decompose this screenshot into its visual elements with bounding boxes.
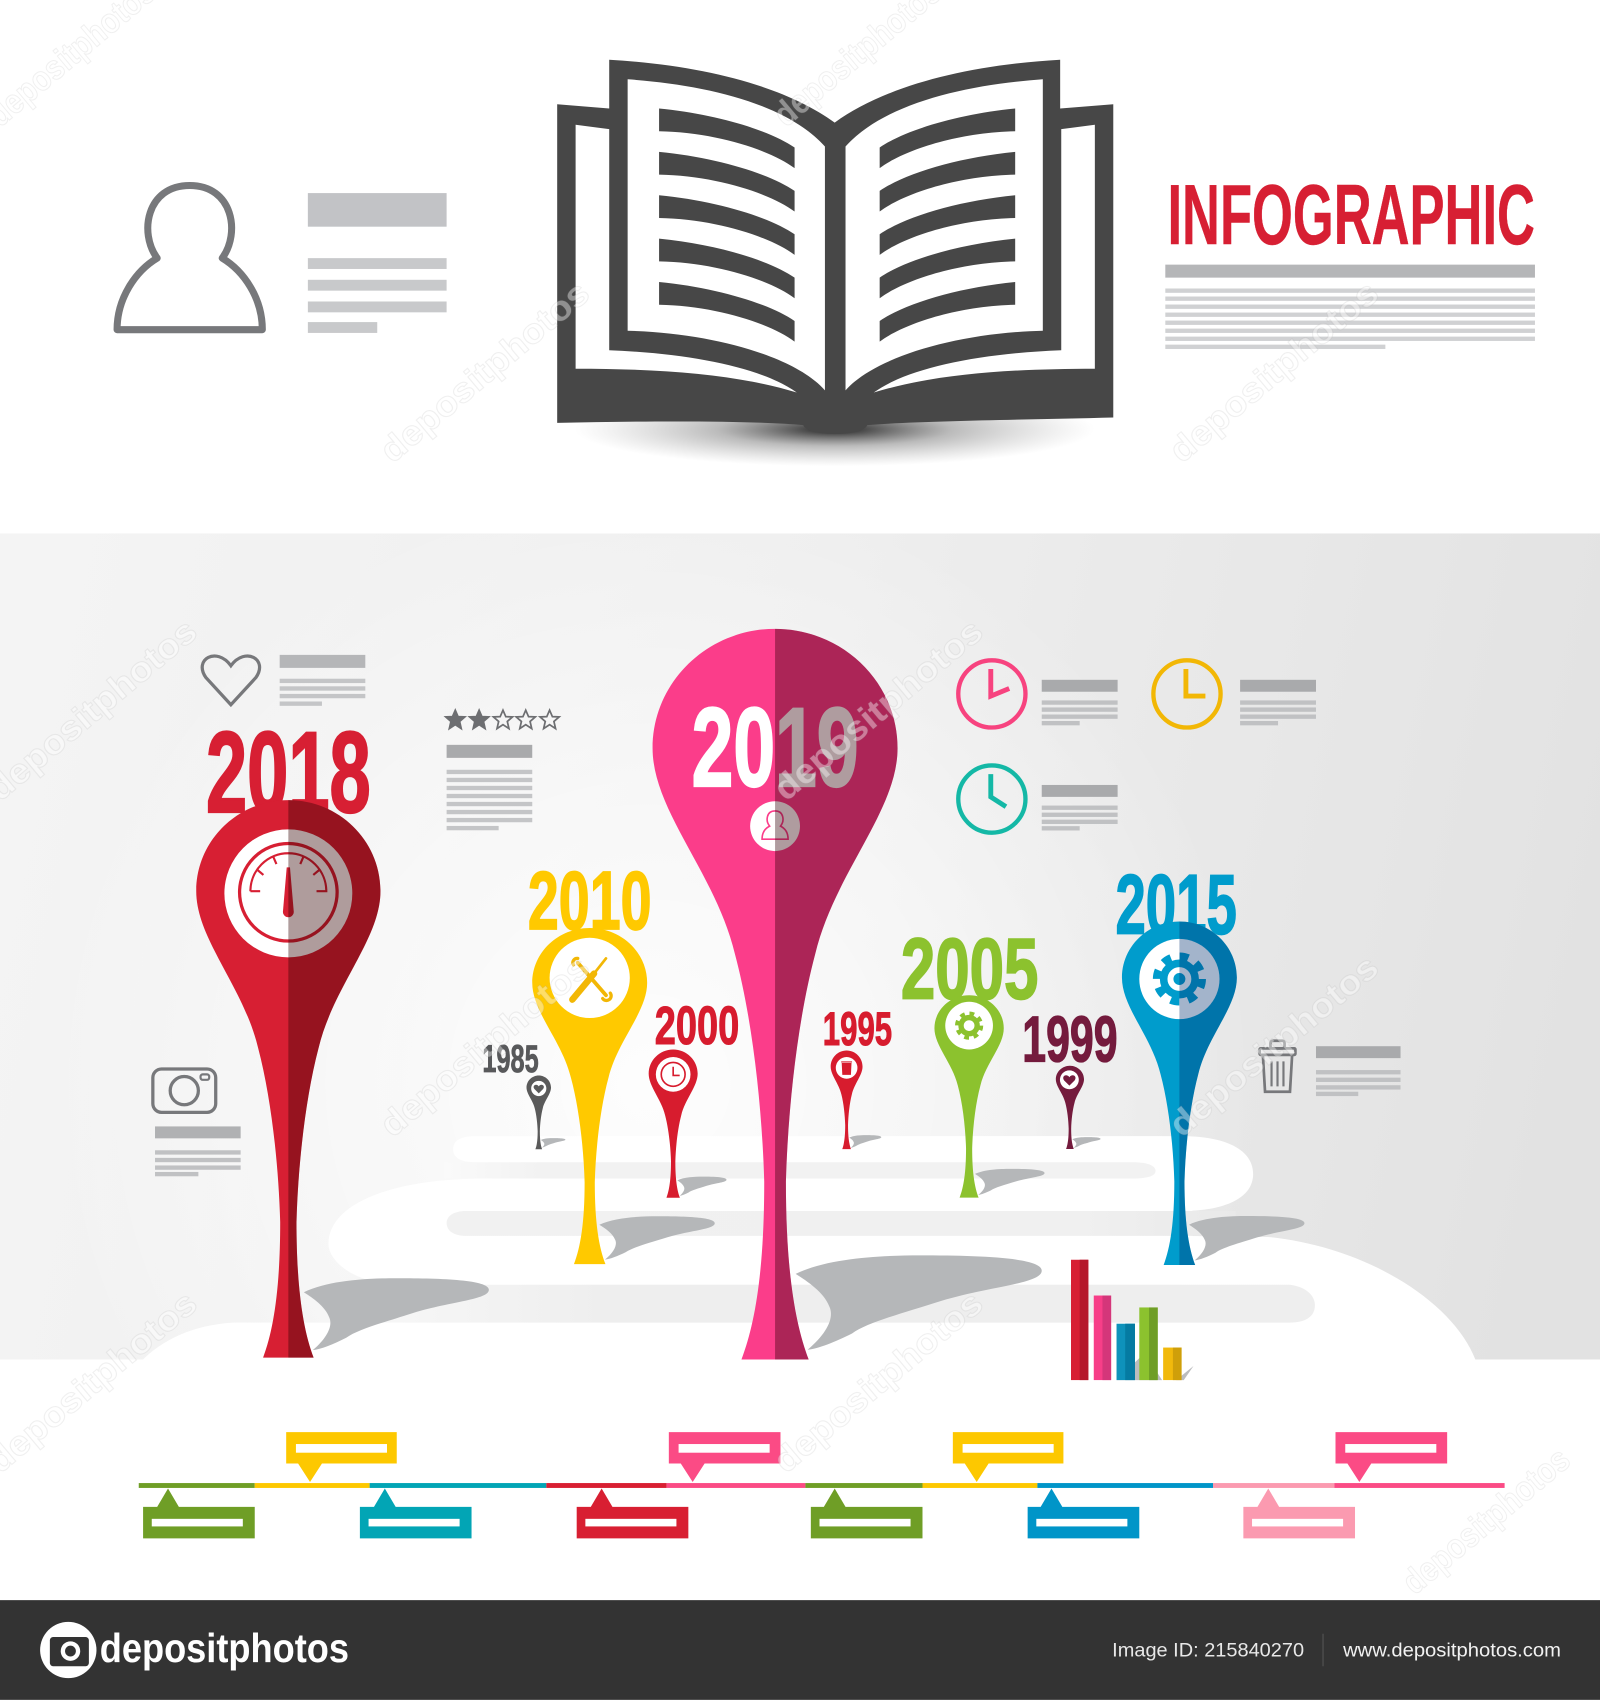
pin: 2015: 2015 (1115, 856, 1237, 951)
callout: pink top 1 (669, 1432, 780, 1482)
pin: 2000 (649, 996, 739, 1198)
pin: 2005: 2005 (901, 921, 1038, 1018)
callout: green bottom 1 (143, 1488, 255, 1538)
icon: open book (557, 60, 1113, 466)
panel: timeline scene background (0, 533, 1600, 1359)
footer logo: camera badge (40, 1622, 96, 1678)
pin: 2010 (528, 855, 715, 1264)
footer: image id: Image ID: 215840270 (1112, 1640, 1304, 1662)
winding white road (141, 1136, 1475, 1362)
bar chart (1071, 1260, 1193, 1380)
icon: heart (202, 656, 260, 705)
callout: blue bottom (1028, 1488, 1139, 1538)
footer logo: wordmark: depositphotos (100, 1625, 349, 1671)
pin: 2019 (653, 629, 1042, 1359)
text block: star rating description (447, 745, 532, 830)
callout: yellow top 1 (286, 1432, 397, 1482)
icon: person in pin (762, 811, 788, 839)
pin: 2018: 2018 (206, 709, 371, 837)
icon: speedometer (240, 843, 337, 941)
icon: camera (153, 1069, 216, 1112)
watermarks: depositphotos (373, 948, 597, 1144)
icon: person outline (117, 186, 262, 330)
callout: yellow top 2 (953, 1432, 1063, 1482)
pin: 2010: 2010 (528, 855, 651, 947)
icon: teal clock (958, 765, 1025, 833)
icon: trash can (1260, 1041, 1295, 1092)
watermarks: depositphotos (1162, 948, 1386, 1144)
pin: 1995: 1995 (823, 1003, 892, 1056)
pin: 1999: 1999 (1022, 1002, 1118, 1075)
icon: star rating (446, 710, 559, 729)
pin: 2015 (1115, 856, 1304, 1265)
pin: 2000: 2000 (655, 996, 739, 1056)
watermarks: depositphotos (767, 1284, 990, 1481)
pin: 2018 (196, 709, 489, 1358)
pin: 2005 (901, 921, 1045, 1198)
pin: 1985: 1985 (482, 1038, 539, 1081)
watermarks: depositphotos (1162, 274, 1386, 470)
text block: pink clock (1042, 680, 1118, 725)
callout: red bottom (577, 1488, 688, 1538)
road stripe: middle (447, 1211, 1236, 1236)
icon: gear (1157, 956, 1202, 1002)
pin: 1995 (823, 1003, 892, 1149)
icon: wrench and screwdriver (572, 958, 611, 1000)
text block: person description (308, 193, 447, 333)
callout: pink top 2 (1336, 1432, 1447, 1482)
footer: website: www.depositphotos.com (1342, 1640, 1561, 1662)
text block: teal clock (1042, 785, 1118, 830)
pin: 2019: 2019 (692, 684, 859, 810)
icon: pink clock (958, 660, 1025, 728)
icon: yellow clock (1153, 660, 1221, 728)
callout: green bottom 2 (811, 1488, 922, 1538)
watermarks: depositphotos (767, 612, 990, 808)
callout: light pink bottom (1243, 1488, 1355, 1538)
footer bar (0, 1600, 1600, 1700)
road stripe: lower (401, 1285, 1315, 1323)
pin: 1985 (482, 1038, 565, 1149)
timeline line (139, 1483, 1505, 1488)
callout: teal bottom (360, 1488, 472, 1538)
watermarks: depositphotos (373, 274, 597, 470)
text block: yellow clock (1240, 680, 1316, 725)
pin: 1999 (1022, 1002, 1118, 1149)
text block: infographic description (1165, 265, 1535, 349)
text block: camera (155, 1126, 241, 1176)
road stripe: upper (444, 1162, 1156, 1178)
text block: trash can (1316, 1046, 1401, 1096)
text block: heart item (202, 655, 365, 706)
watermarks: depositphotos (1395, 1440, 1578, 1602)
